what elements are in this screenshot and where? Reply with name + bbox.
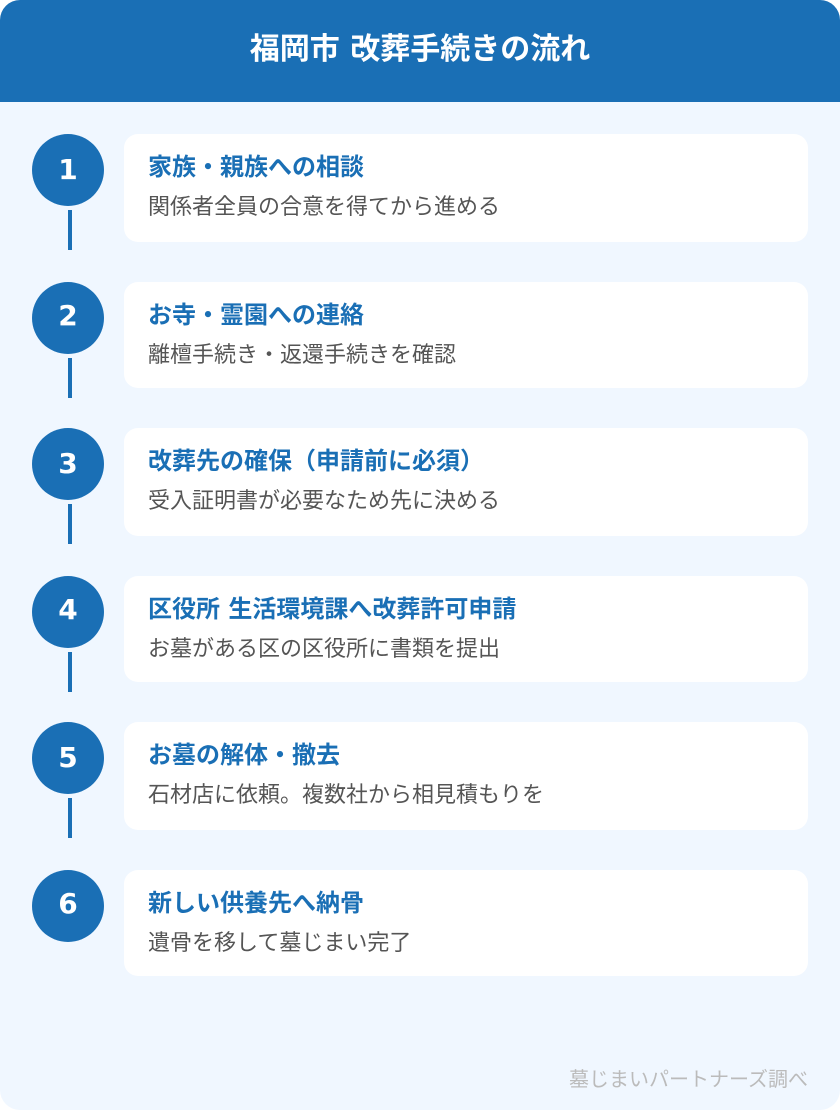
step 2 text: 離檀手続き・返還手続きを確認 (148, 343, 456, 368)
source footer: 墓じまいパートナーズ調べ (569, 1067, 808, 1091)
step 1 number: 1 (58, 153, 78, 186)
step 1 number (32, 134, 104, 206)
connector 3 (68, 504, 72, 544)
step 3 heading: 改葬先の確保（申請前に必須） (148, 447, 484, 475)
step 4 text: お墓がある区の区役所に書類を提出 (148, 637, 500, 662)
step 6 number (32, 870, 104, 942)
step 2 card (124, 282, 808, 388)
step 4 number: 4 (58, 593, 78, 626)
step 2 number (32, 282, 104, 354)
step 5 number: 5 (58, 741, 78, 774)
step 6 text: 遺骨を移して墓じまい完了 (148, 931, 411, 956)
step 6 card (124, 870, 808, 976)
step 5 card (124, 722, 808, 830)
step 3 number: 3 (58, 447, 78, 480)
step 1 heading: 家族・親族への相談 (148, 153, 364, 181)
title (0, 0, 840, 102)
step 6 number: 6 (58, 887, 78, 920)
step 5 heading: お墓の解体・撤去 (148, 741, 340, 769)
step 6 heading: 新しい供養先へ納骨 (148, 889, 364, 917)
connector 4 (68, 652, 72, 692)
step 3 text: 受入証明書が必要なため先に決める (148, 489, 500, 514)
step 5 number (32, 722, 104, 794)
connector 1 (68, 210, 72, 250)
step 3 card (124, 428, 808, 536)
step 2 number: 2 (58, 299, 78, 332)
step 4 number (32, 576, 104, 648)
step 5 text: 石材店に依頼。複数社から相見積もりを (148, 783, 544, 808)
step 1 card (124, 134, 808, 242)
connector 5 (68, 798, 72, 838)
step 3 number (32, 428, 104, 500)
step 4 card (124, 576, 808, 682)
connector 2 (68, 358, 72, 398)
step 1 text: 関係者全員の合意を得てから進める (148, 195, 500, 220)
step 4 heading: 区役所 生活環境課へ改葬許可申請 (148, 595, 516, 623)
title: 福岡市 改葬手続きの流れ (250, 32, 590, 67)
step 2 heading: お寺・霊園への連絡 (148, 301, 364, 329)
